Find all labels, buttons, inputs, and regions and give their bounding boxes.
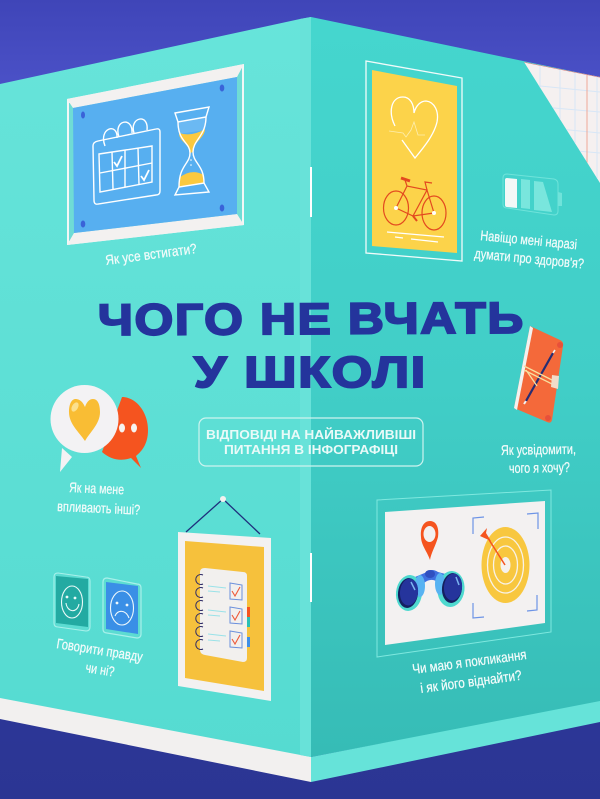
subtitle badge: ВІДПОВІДІ НА НАЙВАЖЛИВІШІ bbox=[206, 427, 416, 442]
question: wants: Як усвідомити, bbox=[501, 441, 576, 458]
question: influence: Як на мене bbox=[69, 479, 125, 497]
question: truth: Говорити правду bbox=[56, 635, 144, 665]
picture: calendar and hourglass bbox=[67, 64, 244, 245]
icon: map pin bbox=[421, 521, 438, 560]
icon: sad face bbox=[103, 578, 141, 638]
picture: calling bbox=[377, 490, 551, 657]
icon: happy face bbox=[54, 573, 90, 631]
icon: calendar bbox=[93, 119, 160, 204]
title bbox=[98, 294, 525, 397]
title: ЧОГО НЕ ВЧАТЬ bbox=[98, 294, 525, 345]
icon: hourglass bbox=[175, 107, 209, 195]
question: wants: чого я хочу? bbox=[509, 459, 570, 476]
question: time: Як усе встигати? bbox=[104, 240, 198, 268]
question: influence: впливають інші? bbox=[57, 498, 141, 518]
subtitle badge bbox=[199, 418, 423, 466]
subtitle badge: ПИТАННЯ В ІНФОГРАФІЦІ bbox=[224, 442, 398, 457]
question: wants bbox=[501, 441, 576, 476]
question: calling: і як його віднайти? bbox=[419, 667, 523, 696]
panel: left cover bbox=[0, 17, 311, 782]
icon: notebook with pencil bbox=[514, 326, 563, 423]
icon: heart with pulse bbox=[389, 97, 438, 158]
icon: binoculars bbox=[394, 570, 466, 612]
icon: speech bubbles bbox=[50, 385, 148, 472]
question: health bbox=[474, 227, 585, 272]
icon: battery bbox=[503, 174, 562, 215]
question: truth: чи ні? bbox=[85, 659, 116, 680]
question: truth bbox=[56, 635, 144, 680]
picture: hanging checklist bbox=[178, 496, 271, 701]
spine marks bbox=[310, 167, 312, 602]
panel: right cover bbox=[300, 17, 600, 782]
panel: graph paper corner bbox=[524, 62, 600, 183]
checklist bbox=[196, 568, 250, 662]
question: influence bbox=[57, 479, 141, 518]
icon: bicycle bbox=[384, 178, 446, 230]
question: calling: Чи маю я покликання bbox=[411, 646, 527, 677]
picture: health poster bbox=[366, 61, 462, 261]
icon: target bbox=[473, 513, 538, 618]
title: У ШКОЛІ bbox=[194, 348, 427, 397]
question: calling bbox=[411, 646, 527, 696]
